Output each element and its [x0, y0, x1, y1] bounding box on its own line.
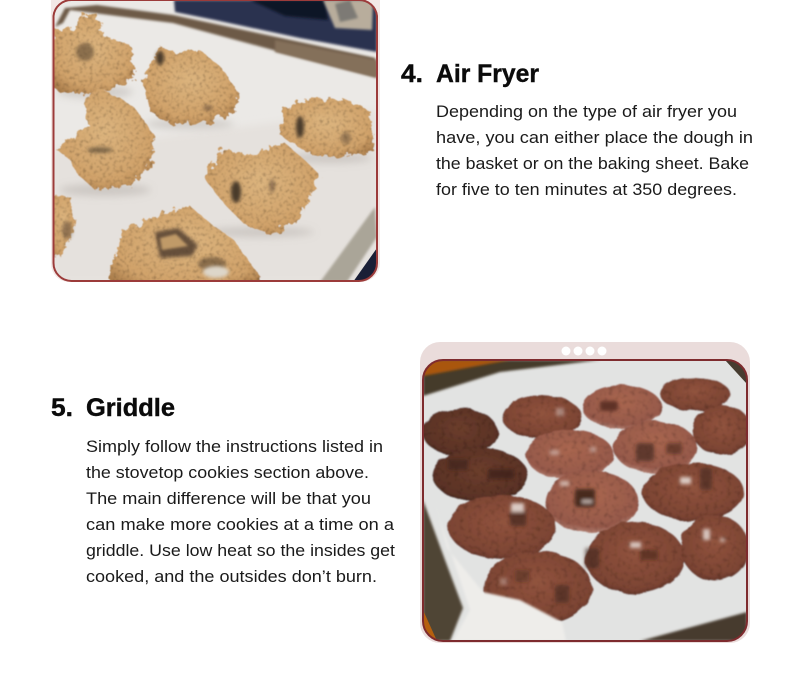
text block: griddle instructions: Simply follow the instructions listed in	[86, 437, 383, 456]
heading: Air Fryer: 4.	[401, 60, 423, 88]
text block: air fryer instructions: the basket or on the baking sheet. Bake	[436, 154, 749, 173]
baking sheet rim	[55, 5, 377, 77]
text block: air fryer instructions: for five to ten minutes at 350 degrees.	[436, 180, 737, 199]
text block: air fryer instructions	[436, 102, 753, 199]
panel backing	[51, 0, 380, 282]
text block: griddle instructions: the stovetop cookies section above.	[86, 463, 369, 482]
photo: cookie dough on baking sheet	[50, 0, 377, 292]
chocolate chunks	[448, 408, 725, 603]
chocolate chips	[62, 43, 351, 271]
dough scoops	[50, 14, 374, 292]
text block: air fryer instructions: Depending on the type of air fryer you	[436, 102, 737, 121]
text block: air fryer instructions: have, you can either place the dough in	[436, 128, 753, 147]
photo border	[54, 0, 377, 281]
window dots	[562, 346, 606, 356]
silver rim and dark corner	[320, 207, 377, 282]
heading: Air Fryer: Air Fryer	[436, 60, 539, 88]
panel backing	[420, 342, 750, 643]
text block: griddle instructions: The main difference will be that you	[86, 489, 371, 508]
photo: baked chocolate cookies	[422, 360, 752, 641]
dough shadows	[57, 86, 372, 237]
tray edges	[423, 360, 600, 396]
heading: Griddle: Griddle	[86, 394, 175, 422]
cookies	[422, 377, 752, 625]
oven mitt	[174, 0, 377, 52]
panel: griddle photo	[420, 342, 752, 643]
text block: griddle instructions	[86, 437, 395, 586]
heading: Griddle: 5.	[51, 394, 73, 422]
photo border	[423, 360, 747, 641]
panel: air fryer photo	[50, 0, 380, 292]
text block: griddle instructions: griddle. Use low heat so the insides get	[86, 541, 395, 560]
text block: griddle instructions: cooked, and the outsides don’t burn.	[86, 567, 377, 586]
parchment fold	[454, 559, 564, 640]
text block: griddle instructions: can make more cookies at a time on a	[86, 515, 395, 534]
